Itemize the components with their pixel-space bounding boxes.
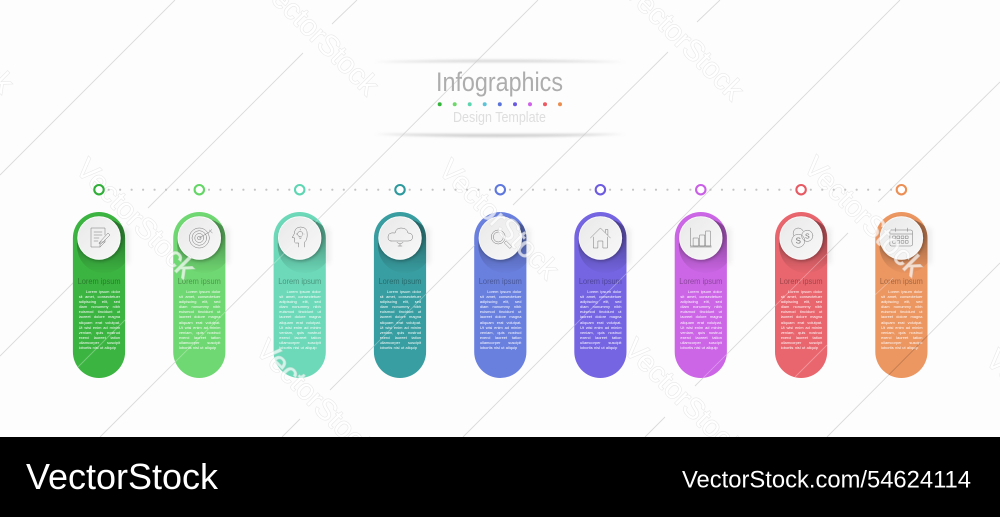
body text: diam nonummy nibh xyxy=(179,304,220,309)
body text: sit amet, consectetuer xyxy=(79,294,120,299)
body text: sit amet, consectetuer xyxy=(781,294,822,299)
icon: bar chart xyxy=(690,228,711,247)
circle badge xyxy=(680,217,722,259)
body text: veniam, quis nostrud xyxy=(79,330,120,335)
panel: step 9 orange xyxy=(875,212,933,378)
icon: cloud xyxy=(388,228,412,246)
body text: adipiscing elit, sed xyxy=(580,299,622,304)
body text: euismod tincidunt ut xyxy=(380,309,421,314)
body text: laoreet dolore magna xyxy=(781,314,822,319)
body text: exerci laoreet tation xyxy=(279,335,321,340)
body text: veniam, quis nostrud xyxy=(380,330,421,335)
icon: calendar xyxy=(890,228,912,246)
body text xyxy=(279,289,321,352)
circle badge xyxy=(479,217,522,259)
panel: step 3 mint xyxy=(274,212,332,378)
body text: exerci laoreet tation xyxy=(380,335,421,340)
watermark text: VectorStock xyxy=(69,153,202,285)
body text: Lorem ipsum dolor xyxy=(487,289,521,294)
icon: coins xyxy=(792,228,813,247)
body text: ullamcorper suscipit xyxy=(580,340,622,345)
body text: adipiscing elit, sed xyxy=(380,299,421,304)
body text: lobortis nisl ut aliquip xyxy=(380,345,417,350)
body text: euismod tincidunt ut xyxy=(79,309,120,314)
body text: ullamcorper suscipit xyxy=(79,340,120,345)
body text: Ut wisi enim ad minim xyxy=(480,325,521,330)
panel: step 1 green xyxy=(73,212,131,378)
footer URL text: VectorStock.com/54624114 xyxy=(682,466,971,494)
body text xyxy=(380,289,422,352)
body text: diam nonummy nibh xyxy=(781,304,822,309)
body text: exerci laoreet tation xyxy=(179,335,220,340)
body text: Ut wisi enim ad minim xyxy=(179,325,220,330)
panel: step 8 red xyxy=(775,212,833,378)
body text: aliquam erat volutpat. xyxy=(79,320,120,325)
body text: aliquam erat volutpat. xyxy=(781,320,822,325)
icon: house xyxy=(590,228,610,248)
body text: Lorem ipsum dolor xyxy=(387,289,421,294)
body text: euismod tincidunt ut xyxy=(179,309,220,314)
icon: head with light bulb xyxy=(292,227,307,247)
body text: sit amet, consectetuer xyxy=(380,294,421,299)
body text: exerci laoreet tation xyxy=(580,335,622,340)
body text: laoreet dolore magna xyxy=(380,314,421,319)
body text: adipiscing elit, sed xyxy=(79,299,120,304)
body text: euismod tincidunt ut xyxy=(480,309,521,314)
body text: sit amet, consectetuer xyxy=(480,294,521,299)
body text xyxy=(881,289,923,352)
body text: sit amet, consectetuer xyxy=(881,294,922,299)
heading: Lorem ipsum xyxy=(178,277,221,286)
bottom shadow strip xyxy=(375,134,625,137)
body text: aliquam erat volutpat. xyxy=(279,320,321,325)
panel: step 2 light green xyxy=(173,212,231,378)
circle badge xyxy=(178,217,221,259)
body text: diam nonummy nibh xyxy=(79,304,120,309)
body text: lobortis nisl ut aliquip xyxy=(179,345,216,350)
body text: ullamcorper suscipit xyxy=(480,340,521,345)
body text: lobortis nisl ut aliquip xyxy=(781,345,818,350)
body text: Ut wisi enim ad minim xyxy=(680,325,722,330)
body text: adipiscing elit, sed xyxy=(781,299,822,304)
watermark text: VectorStock xyxy=(617,333,750,465)
body text: lobortis nisl ut aliquip xyxy=(881,345,918,350)
body text: lobortis nisl ut aliquip xyxy=(480,345,517,350)
body text: diam nonummy nibh xyxy=(580,304,622,309)
body text: Ut wisi enim ad minim xyxy=(380,325,421,330)
body text: adipiscing elit, sed xyxy=(480,299,521,304)
heading: Lorem ipsum xyxy=(579,277,622,286)
body text: exerci laoreet tation xyxy=(881,335,922,340)
body text: laoreet dolore magna xyxy=(680,314,722,319)
body text: Lorem ipsum dolor xyxy=(688,289,722,294)
body text: Ut wisi enim ad minim xyxy=(781,325,822,330)
body text: exerci laoreet tation xyxy=(480,335,521,340)
watermark text: VectorStock xyxy=(249,334,382,466)
icon: document and pencil xyxy=(91,228,110,247)
icon: coins: S xyxy=(796,237,801,246)
heading: Lorem ipsum xyxy=(780,277,823,286)
heading: Infographics: Infographics xyxy=(436,67,563,97)
body text: Ut wisi enim ad minim xyxy=(881,325,922,330)
circle badge xyxy=(780,217,822,259)
body text: euismod tincidunt ut xyxy=(580,309,622,314)
heading: Lorem ipsum xyxy=(378,277,422,286)
body text: veniam, quis nostrud xyxy=(881,330,922,335)
body text xyxy=(79,289,121,352)
body text xyxy=(179,289,221,352)
subtitle: Design Template: Design Template xyxy=(453,110,546,126)
body text: aliquam erat volutpat. xyxy=(179,320,220,325)
body text: laoreet dolore magna xyxy=(279,314,321,319)
body text: exerci laoreet tation xyxy=(79,335,120,340)
watermark text: VectorStock xyxy=(432,154,565,286)
watermark text: VectorStock xyxy=(797,151,930,283)
panel: step 7 purple xyxy=(675,212,733,378)
circle badge xyxy=(278,217,321,259)
body text: adipiscing elit, sed xyxy=(680,299,722,304)
body text: lobortis nisl ut aliquip xyxy=(680,345,718,350)
circle badge xyxy=(579,217,622,259)
body text: Lorem ipsum dolor xyxy=(788,289,822,294)
heading: Lorem ipsum xyxy=(679,277,723,286)
circle badge xyxy=(78,217,120,259)
panel: step 4 teal xyxy=(374,212,432,378)
heading: Lorem ipsum xyxy=(479,277,522,286)
icon: coins: S xyxy=(805,233,810,240)
body text xyxy=(781,289,823,352)
body text: euismod tincidunt ut xyxy=(279,309,321,314)
body text: veniam, quis nostrud xyxy=(480,330,521,335)
body text: Lorem ipsum dolor xyxy=(587,289,622,294)
body text: diam nonummy nibh xyxy=(279,304,321,309)
title block xyxy=(375,60,625,137)
body text: veniam, quis nostrud xyxy=(279,330,321,335)
body text: Lorem ipsum dolor xyxy=(86,289,120,294)
body text: aliquam erat volutpat. xyxy=(580,320,622,325)
body text: Lorem ipsum dolor xyxy=(186,289,220,294)
colour dots row xyxy=(438,102,562,106)
timeline with ring markers xyxy=(94,185,906,194)
circle badge xyxy=(379,217,421,259)
body text: adipiscing elit, sed xyxy=(881,299,922,304)
body text: diam nonummy nibh xyxy=(380,304,421,309)
body text: exerci laoreet tation xyxy=(781,335,822,340)
body text: sit amet, consectetuer xyxy=(279,294,321,299)
body text: Ut wisi enim ad minim xyxy=(580,325,622,330)
body text: euismod tincidunt ut xyxy=(781,309,822,314)
body text xyxy=(680,289,722,352)
body text: ullamcorper suscipit xyxy=(881,340,922,345)
body text: aliquam erat volutpat. xyxy=(480,320,521,325)
panel: step 6 violet xyxy=(574,212,632,378)
body text xyxy=(580,289,622,352)
body text: laoreet dolore magna xyxy=(179,314,220,319)
body text: aliquam erat volutpat. xyxy=(380,320,421,325)
body text: exerci laoreet tation xyxy=(680,335,722,340)
body text: sit amet, consectetuer xyxy=(680,294,722,299)
heading: Lorem ipsum xyxy=(880,277,923,286)
body text: lobortis nisl ut aliquip xyxy=(580,345,617,350)
heading: Lorem ipsum xyxy=(278,277,322,286)
body text: laoreet dolore magna xyxy=(881,314,922,319)
body text: laoreet dolore magna xyxy=(79,314,120,319)
body text: euismod tincidunt ut xyxy=(881,309,922,314)
body text: Ut wisi enim ad minim xyxy=(279,325,321,330)
body text: ullamcorper suscipit xyxy=(680,340,722,345)
body text: sit amet, consectetuer xyxy=(179,294,220,299)
body text: euismod tincidunt ut xyxy=(680,309,722,314)
body text: diam nonummy nibh xyxy=(480,304,521,309)
body text: lobortis nisl ut aliquip xyxy=(79,345,116,350)
top shadow strip xyxy=(375,60,625,62)
body text: diam nonummy nibh xyxy=(881,304,922,309)
body text: veniam, quis nostrud xyxy=(580,330,622,335)
body text: lobortis nisl ut aliquip xyxy=(279,345,317,350)
panel: step 5 blue xyxy=(474,212,532,378)
icon: magnifier xyxy=(491,230,512,248)
body text: adipiscing elit, sed xyxy=(279,299,321,304)
body text: Ut wisi enim ad minim xyxy=(79,325,120,330)
body text: ullamcorper suscipit xyxy=(781,340,822,345)
footer bar xyxy=(0,437,1000,517)
body text: Lorem ipsum dolor xyxy=(287,289,321,294)
body text: veniam, quis nostrud xyxy=(781,330,822,335)
body text: veniam, quis nostrud xyxy=(680,330,722,335)
body text xyxy=(480,289,522,352)
body text: ullamcorper suscipit xyxy=(179,340,220,345)
body text: laoreet dolore magna xyxy=(480,314,521,319)
icon: target with arrow xyxy=(189,228,212,248)
heading: Lorem ipsum xyxy=(78,277,121,286)
body text: adipiscing elit, sed xyxy=(179,299,220,304)
body text: diam nonummy nibh xyxy=(680,304,722,309)
body text: ullamcorper suscipit xyxy=(380,340,421,345)
footer logo text: VectorStock xyxy=(26,456,219,497)
body text: aliquam erat volutpat. xyxy=(881,320,922,325)
body text: Lorem ipsum dolor xyxy=(888,289,922,294)
body text: ullamcorper suscipit xyxy=(279,340,321,345)
body text: sit amet, consectetuer xyxy=(580,294,622,299)
body text: aliquam erat volutpat. xyxy=(680,320,722,325)
body text: veniam, quis nostrud xyxy=(179,330,220,335)
body text: laoreet dolore magna xyxy=(580,314,622,319)
circle badge xyxy=(880,217,923,259)
